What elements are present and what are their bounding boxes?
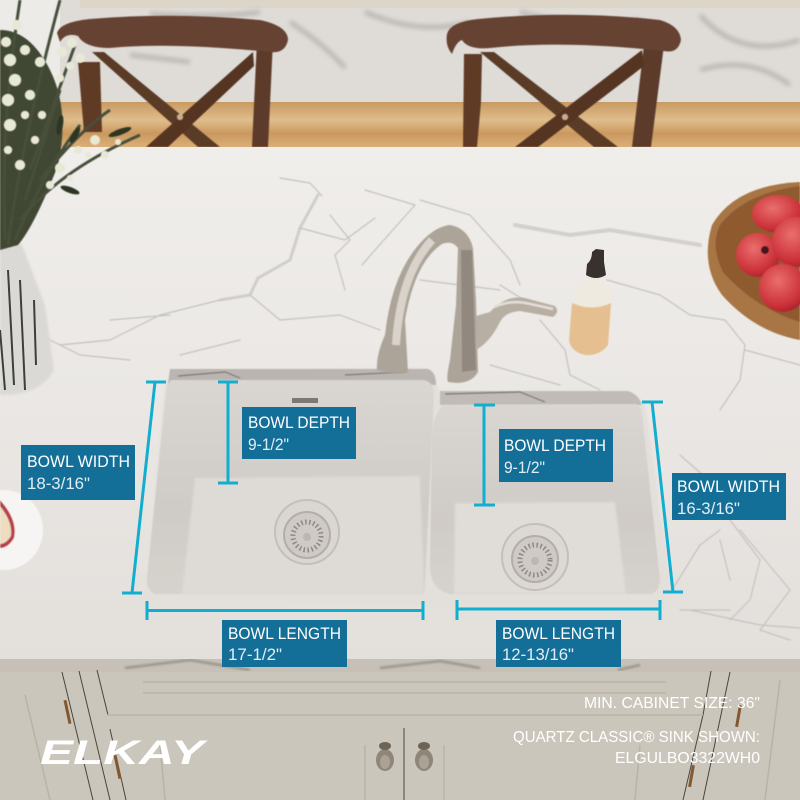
label box xyxy=(222,620,347,667)
cabinet hinges xyxy=(64,700,742,787)
countertop xyxy=(0,147,800,662)
cabinet size and model note: ELGULBO3322WH0 xyxy=(615,750,760,767)
label box: 9-1/2" xyxy=(248,436,289,454)
right bowl xyxy=(430,404,660,594)
fruit bowl with apples xyxy=(708,182,800,340)
dimension arrow xyxy=(218,382,238,483)
left knob xyxy=(376,742,394,771)
label box xyxy=(672,473,786,520)
label box: BOWL DEPTH xyxy=(248,414,350,432)
label box: BOWL LENGTH xyxy=(502,625,615,643)
dimension: right bowl depth xyxy=(474,405,613,505)
cabinet xyxy=(0,659,800,800)
logo: Elkay: ELKAY xyxy=(40,734,209,772)
sink rim xyxy=(138,368,672,606)
chair right xyxy=(447,15,681,147)
drain right xyxy=(502,524,568,590)
sink xyxy=(138,368,672,606)
label box: BOWL LENGTH xyxy=(228,625,341,643)
vase with flowers xyxy=(0,0,140,395)
cabinet size and model note: MIN. CABINET SIZE: 36" xyxy=(584,695,760,712)
label box: BOWL WIDTH xyxy=(27,453,130,471)
marble veins xyxy=(30,178,800,640)
cabinet lines xyxy=(62,670,730,800)
dimension: right bowl width xyxy=(642,402,786,592)
background: dining area xyxy=(0,0,800,147)
dimension arrow xyxy=(457,600,660,620)
plate with apple slice xyxy=(0,490,43,570)
dimension: left bowl length xyxy=(147,601,423,667)
label box: BOWL WIDTH xyxy=(677,478,780,496)
sink badge xyxy=(292,398,318,403)
label box: 12-13/16" xyxy=(502,646,574,664)
label box: 9-1/2" xyxy=(504,459,545,477)
dimension arrow xyxy=(147,601,423,620)
chair left xyxy=(57,16,288,147)
label box: 16-3/16" xyxy=(677,500,740,518)
drain left xyxy=(275,500,339,564)
dimension: left bowl width xyxy=(21,382,166,593)
dimension: left bowl depth xyxy=(218,382,356,483)
right knob xyxy=(415,742,433,771)
left bowl xyxy=(147,380,434,594)
label box xyxy=(21,445,135,500)
dimension arrow xyxy=(474,405,495,505)
dimension arrow xyxy=(642,402,683,592)
cabinet size and model note: QUARTZ CLASSIC® SINK SHOWN: xyxy=(513,729,760,746)
dimension: right bowl length xyxy=(457,600,660,667)
label box: BOWL DEPTH xyxy=(504,437,606,455)
label box xyxy=(496,620,621,667)
dimension arrow xyxy=(122,382,166,593)
label box: 18-3/16" xyxy=(27,475,90,493)
cabinet size and model note xyxy=(513,695,760,767)
faucet xyxy=(377,225,557,383)
label box: 17-1/2" xyxy=(228,646,282,664)
label box xyxy=(242,407,356,459)
label box xyxy=(499,429,613,482)
soap dispenser xyxy=(569,249,612,355)
